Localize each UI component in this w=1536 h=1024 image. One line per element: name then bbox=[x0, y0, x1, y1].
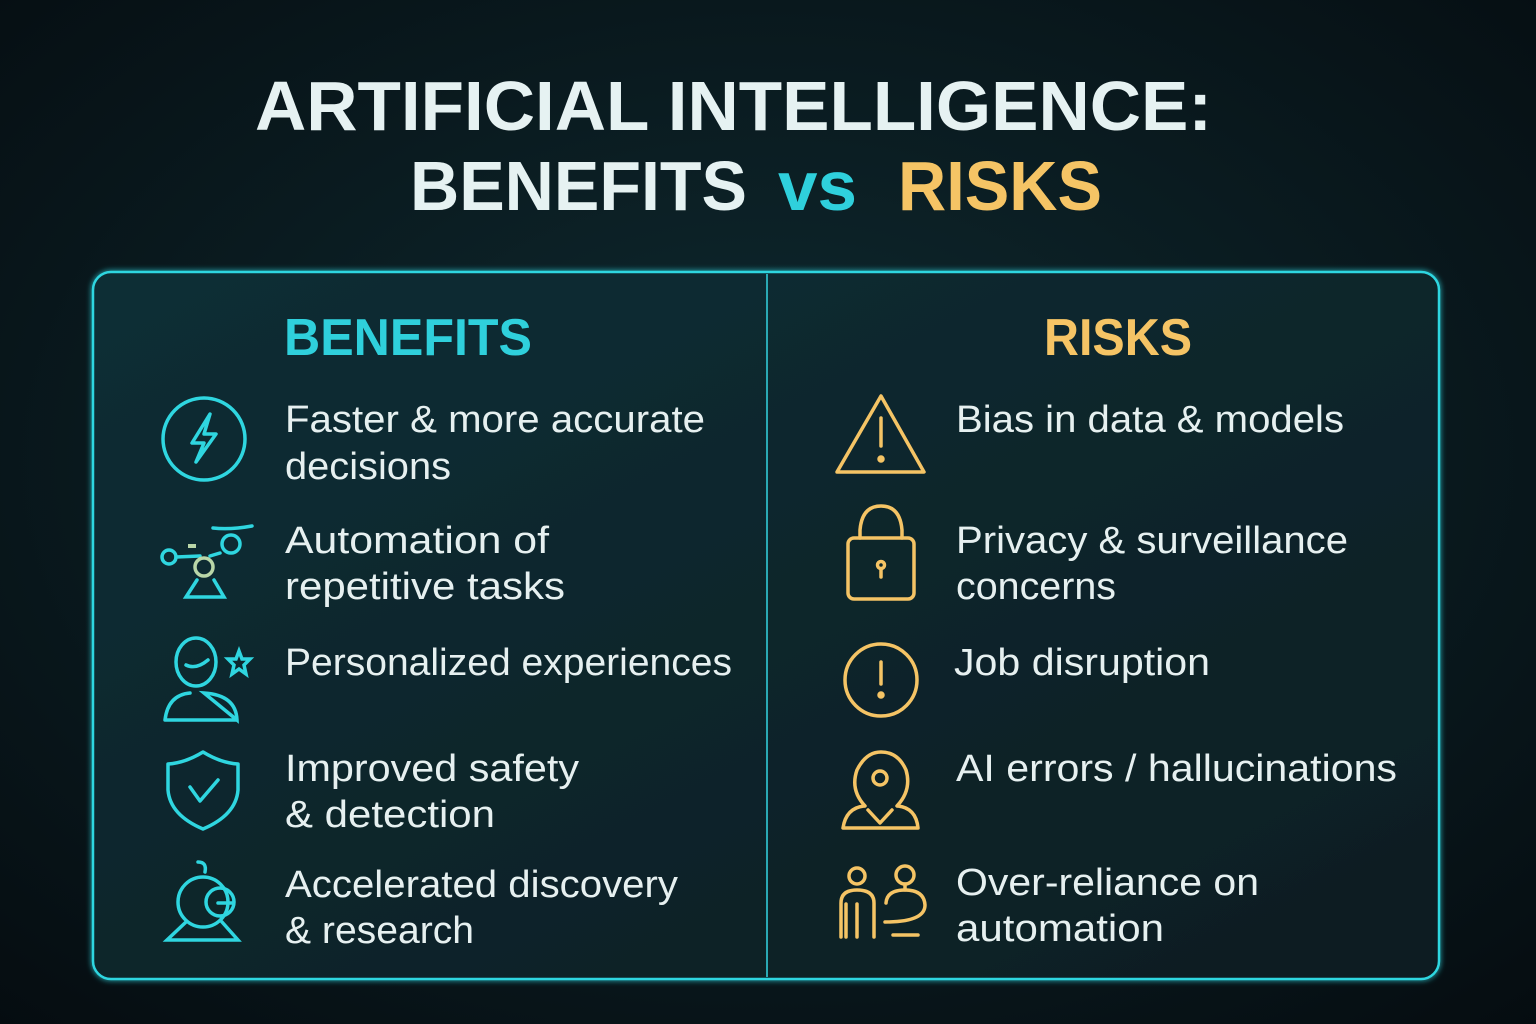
heading: benefits: BENEFITS bbox=[284, 309, 532, 367]
benefit texts: Accelerated discovery bbox=[285, 864, 678, 906]
risk texts: Over-reliance on bbox=[956, 862, 1259, 904]
icon: padlock bbox=[848, 506, 914, 599]
benefit texts: Personalized experiences bbox=[285, 642, 732, 684]
benefit texts: & detection bbox=[285, 794, 495, 836]
title: RISKS bbox=[898, 147, 1102, 225]
icon: person star bbox=[165, 638, 250, 720]
benefit texts: repetitive tasks bbox=[285, 566, 565, 608]
risk texts: concerns bbox=[956, 566, 1116, 608]
benefit texts: & research bbox=[285, 910, 474, 952]
risk texts: Privacy & surveillance bbox=[956, 520, 1348, 562]
icon: lightning bbox=[163, 398, 245, 480]
title: ARTIFICIAL INTELLIGENCE: bbox=[255, 67, 1212, 145]
title bbox=[255, 67, 1212, 225]
icon: warning triangle bbox=[837, 396, 924, 472]
benefit texts: decisions bbox=[285, 446, 451, 488]
heading: risks: RISKS bbox=[1044, 309, 1192, 367]
benefit texts: Automation of bbox=[285, 520, 549, 562]
risk texts: AI errors / hallucinations bbox=[956, 748, 1397, 790]
icon: microscope bbox=[167, 862, 238, 940]
risk texts bbox=[954, 399, 1397, 950]
risk texts: automation bbox=[956, 908, 1164, 950]
panel: comparison bbox=[93, 272, 1439, 979]
benefit texts: Faster & more accurate bbox=[285, 399, 705, 441]
icon: robot arm bbox=[162, 526, 252, 597]
benefit texts: Improved safety bbox=[285, 748, 579, 790]
icon: alert circle bbox=[845, 644, 917, 716]
benefit texts bbox=[285, 399, 732, 952]
icon: two people bbox=[841, 866, 925, 937]
risk texts: Job disruption bbox=[954, 642, 1210, 684]
risk texts: Bias in data & models bbox=[956, 399, 1344, 441]
title: BENEFITS bbox=[410, 147, 747, 225]
title: vs bbox=[778, 147, 857, 225]
icon: shield check bbox=[168, 752, 238, 829]
icon: person pin bbox=[843, 752, 918, 828]
